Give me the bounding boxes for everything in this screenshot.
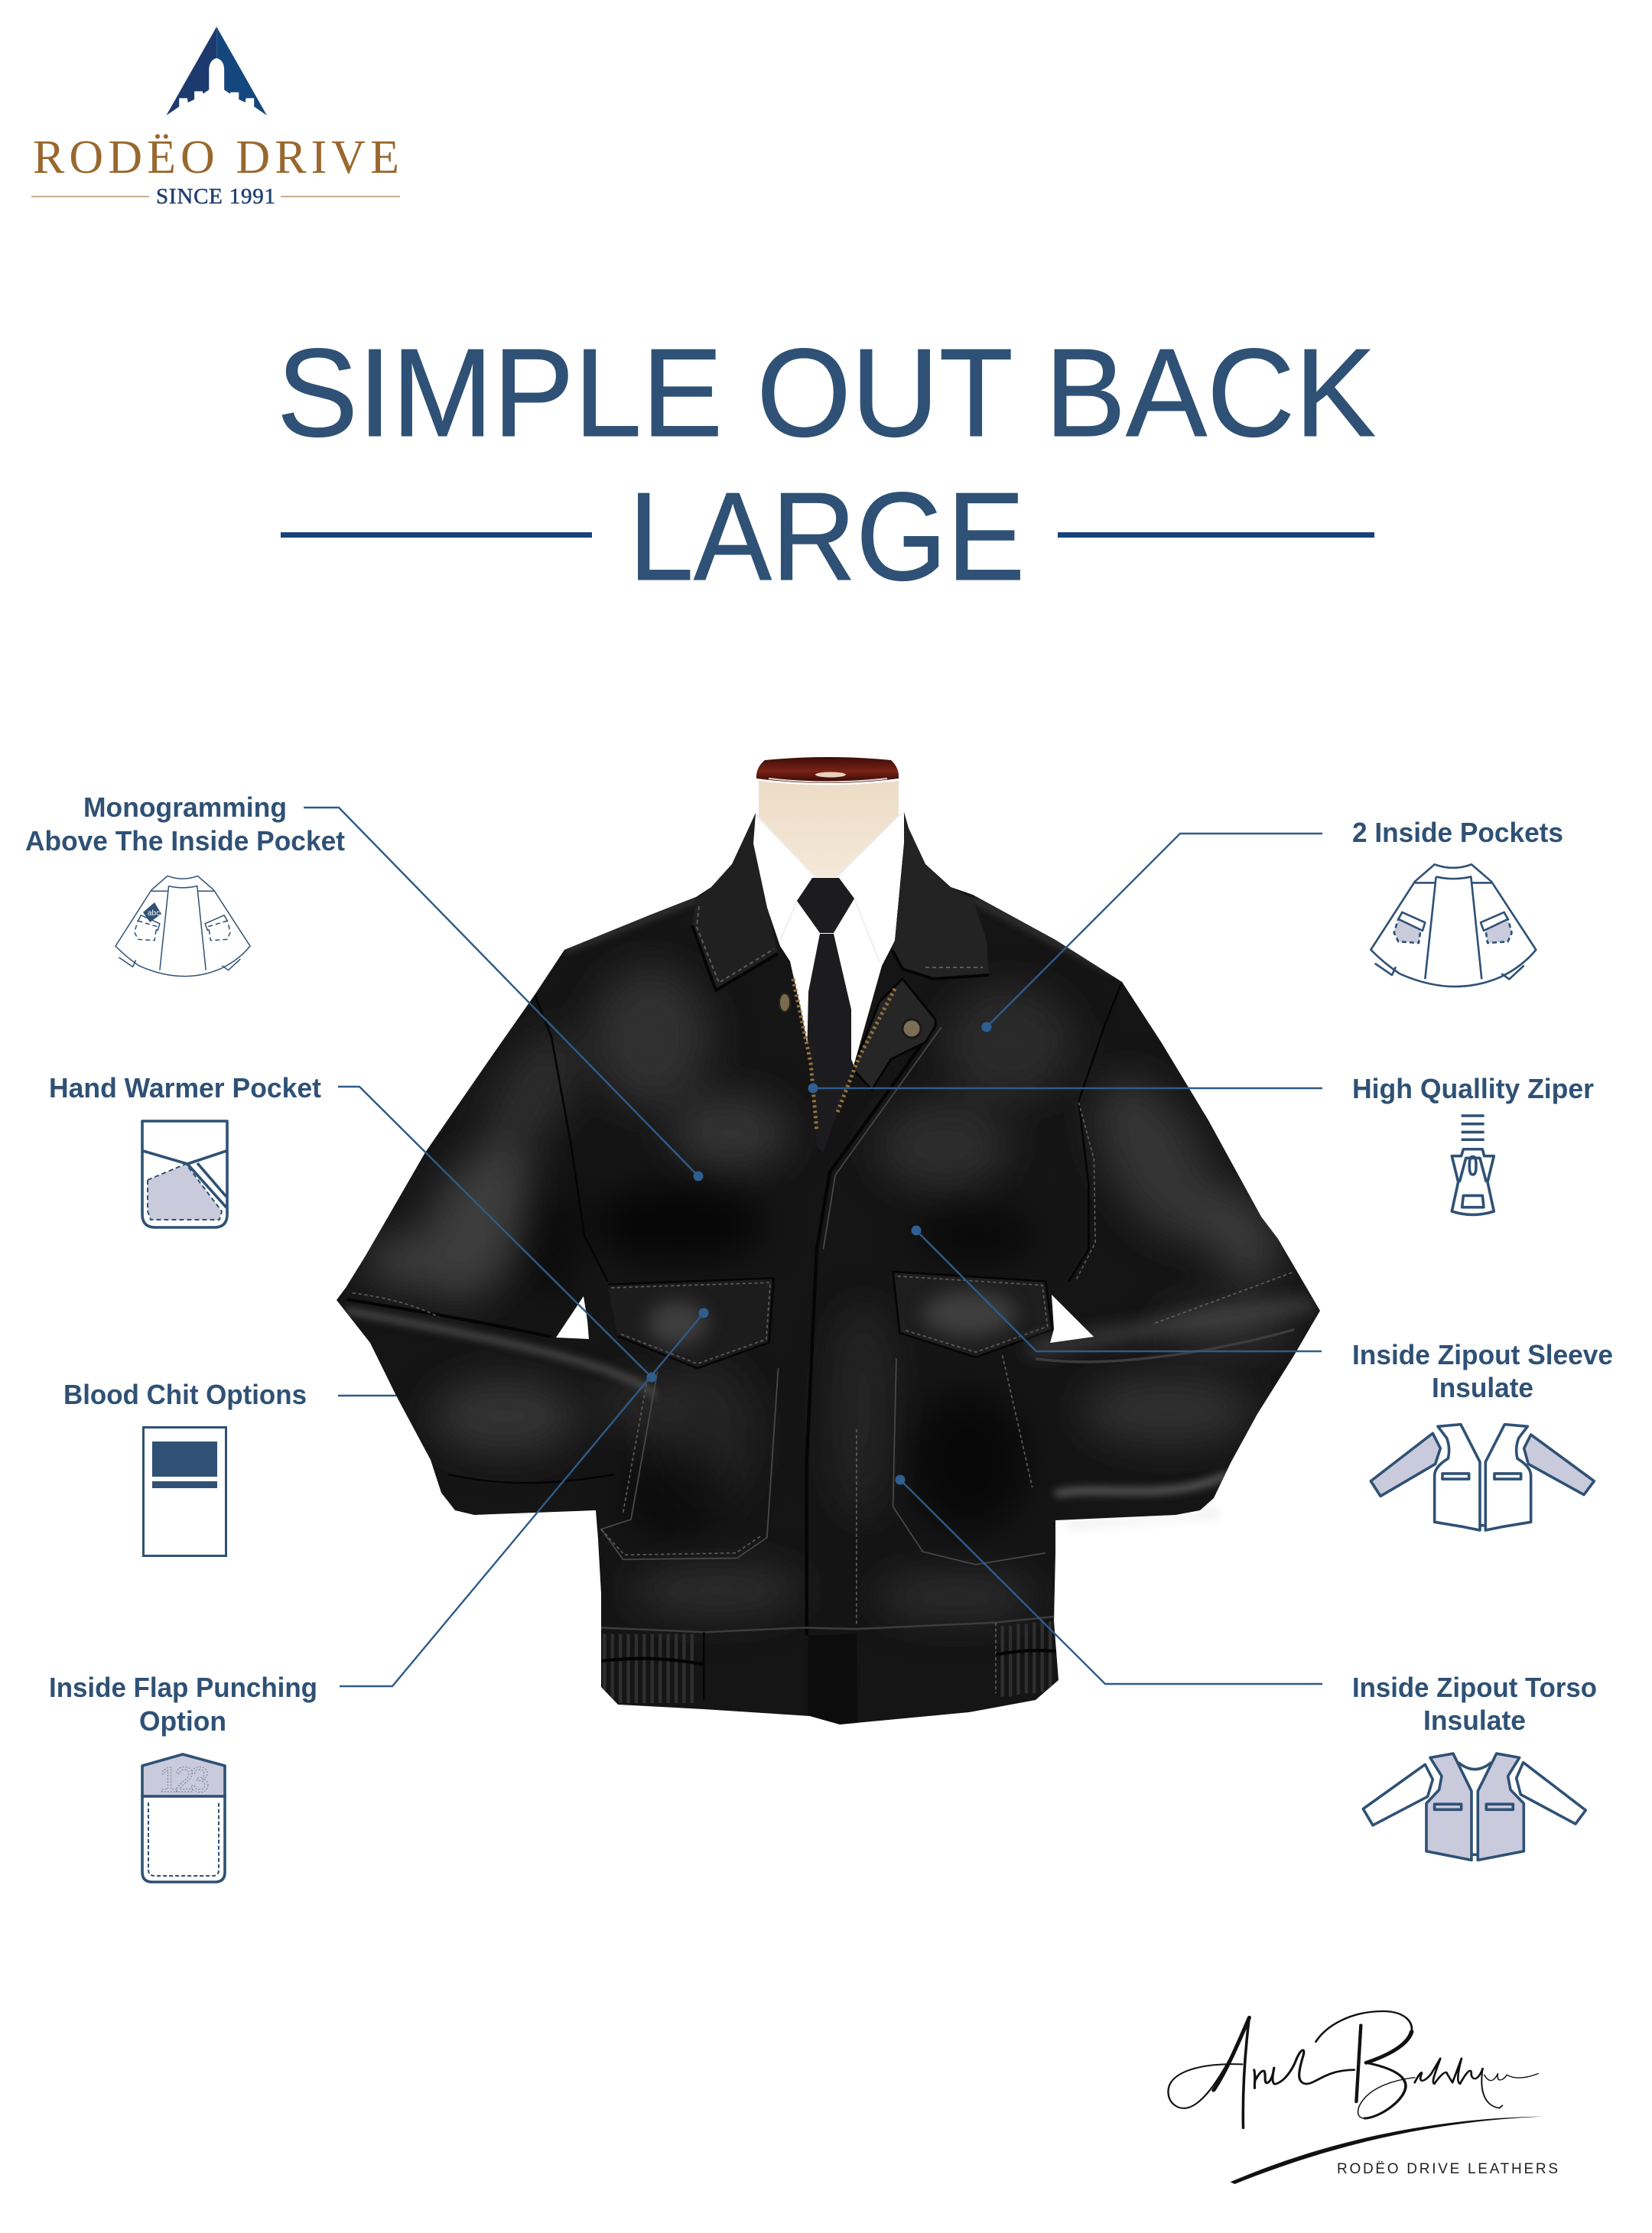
feature: inside flap punching: [49, 1672, 317, 1882]
icon: torso liner: [1363, 1754, 1585, 1860]
mannequin neck: [759, 781, 899, 877]
signature drawing: [1168, 2011, 1538, 2128]
waistband: [601, 1616, 1059, 1725]
leather highlights: [366, 966, 1296, 1619]
title: [277, 323, 1376, 606]
signature caption: RODËO DRIVE LEATHERS: [1337, 2161, 1558, 2177]
right collar: [893, 812, 989, 979]
leader: inside flap punching: [340, 1308, 708, 1686]
leader: blood chit: [338, 1395, 396, 1396]
leader: zipout torso: [895, 1474, 1322, 1684]
signature underline: [1231, 2117, 1543, 2184]
icon: sleeve liner: [1371, 1425, 1594, 1530]
label: inside flap punching: Inside Flap Punching: [49, 1672, 317, 1703]
leader: zipper: [808, 1083, 1322, 1094]
icon: zipper pull: [1452, 1116, 1494, 1214]
leader: zipout sleeve: [912, 1225, 1322, 1351]
label: inside flap punching: [49, 1672, 317, 1737]
left pocket flap: [608, 1278, 773, 1368]
title line 1: SIMPLE OUT BACK: [277, 323, 1376, 463]
right pocket flap: [893, 1272, 1052, 1357]
feature: hand warmer pocket: [49, 1072, 321, 1227]
leader lines: [304, 808, 1322, 1686]
logo: Rodeo Drive: [31, 27, 400, 209]
label: inside zipout torso insulate: Insulate: [1423, 1705, 1526, 1736]
jacket photo on mannequin: [329, 757, 1331, 1736]
tie: [797, 878, 856, 1156]
dark shading: [532, 1172, 1036, 1539]
underarm gaps: [556, 1295, 1094, 1343]
feature: high quality zipper: [1352, 1073, 1594, 1214]
label: inside zipout torso insulate: [1352, 1672, 1597, 1736]
label: hand warmer pocket: Hand Warmer Pocket: [49, 1072, 321, 1103]
feature: 2 inside pockets: [1352, 817, 1563, 986]
label: monogramming: Monogramming: [83, 791, 287, 823]
icon: blood chit: [144, 1427, 226, 1555]
label: high quality zipper: High Quallity Ziper: [1352, 1073, 1594, 1104]
monogram badge: abc: [148, 909, 160, 918]
label: inside zipout sleeve insulate: Inside Zipout Sleeve: [1352, 1339, 1613, 1370]
feature: inside zipout torso insulate: [1352, 1672, 1597, 1860]
icon: open jacket pockets: [1371, 864, 1536, 986]
icon: logo peak: [166, 27, 267, 115]
left button: [779, 993, 790, 1012]
leader: monogramming: [304, 808, 704, 1181]
label: inside zipout sleeve insulate: Insulate: [1432, 1372, 1533, 1403]
mannequin wood cap: [756, 757, 899, 783]
sleeve seams and folds: [346, 899, 1314, 1494]
leader: hand warmer pocket: [338, 1087, 656, 1383]
centre placket: [807, 1024, 941, 1636]
label: blood chit options: Blood Chit Options: [63, 1379, 307, 1410]
shadow under sleeves: [1059, 1507, 1220, 1529]
right button: [902, 1019, 921, 1038]
title line 2: LARGE: [629, 466, 1025, 606]
label: 2 inside pockets: 2 Inside Pockets: [1352, 817, 1563, 848]
shirt collar: [756, 812, 904, 962]
icon: flap punching: 123: [159, 1760, 210, 1799]
icon: open jacket monogram: [115, 876, 250, 977]
icon: flap punching: [142, 1754, 225, 1882]
feature: monogramming: [25, 791, 345, 977]
lower pockets: [601, 1355, 1046, 1565]
logo tagline: SINCE 1991: [156, 184, 275, 209]
zipper teeth: [793, 979, 895, 1132]
label: inside zipout sleeve insulate: [1352, 1339, 1613, 1403]
feature: inside zipout sleeve insulate: [1352, 1339, 1613, 1530]
label: monogramming: [25, 791, 345, 856]
monogram badge: [143, 902, 161, 922]
feature: blood chit options: [63, 1379, 307, 1555]
signature block: [1168, 2011, 1558, 2184]
icon: hand warmer pocket: [142, 1121, 227, 1227]
label: inside flap punching: Option: [139, 1705, 226, 1737]
left collar: [692, 813, 778, 990]
label: monogramming: Above The Inside Pocket: [25, 825, 345, 856]
leader: 2 inside pockets: [982, 834, 1322, 1032]
logo wordmark: RODËO DRIVE: [33, 132, 399, 184]
jacket body: [329, 803, 1331, 1736]
label: inside zipout torso insulate: Inside Zipout Torso: [1352, 1672, 1597, 1703]
zip flap: [853, 979, 935, 1090]
